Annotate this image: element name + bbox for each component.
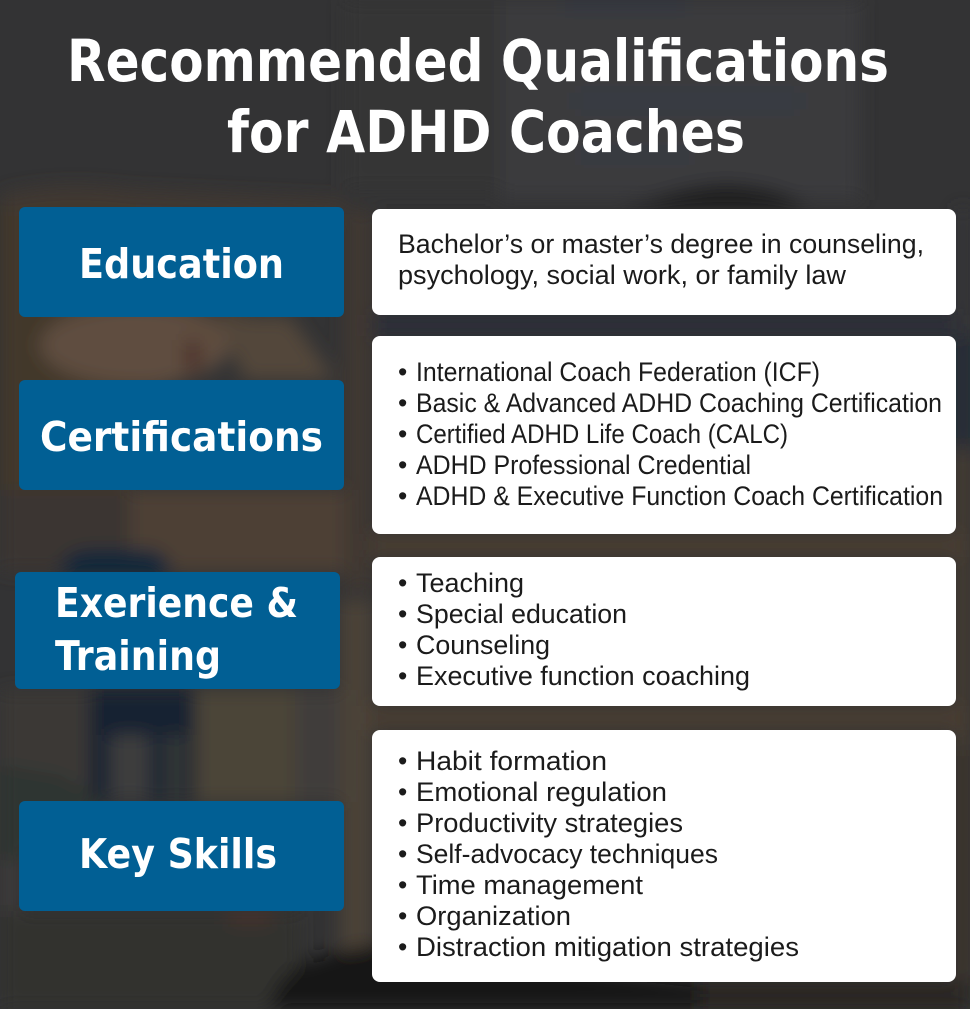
- education label: Education: [79, 240, 284, 288]
- key skills list: [372, 730, 956, 982]
- key skills list: Emotional regulation: [416, 777, 667, 807]
- key skills list: •: [398, 746, 407, 776]
- key skills list: •: [398, 808, 407, 838]
- experience list: Executive function coaching: [416, 661, 750, 691]
- certifications list: •: [398, 481, 407, 511]
- experience list: •: [398, 599, 407, 629]
- panel: certifications: [19, 336, 956, 534]
- education details: psychology, social work, or family law: [398, 260, 847, 290]
- certifications label: [19, 380, 344, 490]
- key skills list: Habit formation: [416, 746, 607, 776]
- title: for ADHD Coaches: [227, 98, 745, 166]
- certifications list: [372, 336, 956, 534]
- experience list: •: [398, 630, 407, 660]
- certifications list: •: [398, 419, 407, 449]
- key skills list: •: [398, 932, 407, 962]
- key skills list: •: [398, 839, 407, 869]
- experience label: Training: [55, 632, 221, 680]
- key skills list: •: [398, 901, 407, 931]
- panel: education: [19, 207, 956, 317]
- certifications list: ADHD & Executive Function Coach Certification: [416, 481, 943, 511]
- experience label: [15, 572, 340, 689]
- key skills list: •: [398, 870, 407, 900]
- certifications list: Basic & Advanced ADHD Coaching Certification: [416, 388, 942, 418]
- certifications list: •: [398, 450, 407, 480]
- key skills list: Time management: [416, 870, 644, 900]
- certifications label: Certifications: [40, 413, 323, 461]
- experience list: Teaching: [416, 568, 524, 598]
- key skills label: [19, 801, 344, 911]
- experience list: Counseling: [416, 630, 550, 660]
- education details: Bachelor’s or master’s degree in counseling,: [398, 229, 924, 259]
- experience label: Exerience &: [55, 579, 298, 627]
- experience list: •: [398, 661, 407, 691]
- certifications list: ADHD Professional Credential: [416, 450, 751, 480]
- key skills list: Self-advocacy techniques: [416, 839, 718, 869]
- key skills label: Key Skills: [79, 830, 277, 878]
- experience list: [372, 557, 956, 706]
- key skills list: Productivity strategies: [416, 808, 683, 838]
- experience list: Special education: [416, 599, 627, 629]
- key skills list: •: [398, 777, 407, 807]
- certifications list: International Coach Federation (ICF): [416, 357, 820, 387]
- panel: key skills: [19, 730, 956, 982]
- title: [67, 27, 889, 166]
- experience list: •: [398, 568, 407, 598]
- key skills list: Organization: [416, 901, 571, 931]
- education details: [372, 209, 956, 315]
- certifications list: •: [398, 388, 407, 418]
- education label: [19, 207, 344, 317]
- certifications list: •: [398, 357, 407, 387]
- panel: experience and training: [15, 557, 956, 706]
- key skills list: Distraction mitigation strategies: [416, 932, 799, 962]
- certifications list: Certified ADHD Life Coach (CALC): [416, 419, 788, 449]
